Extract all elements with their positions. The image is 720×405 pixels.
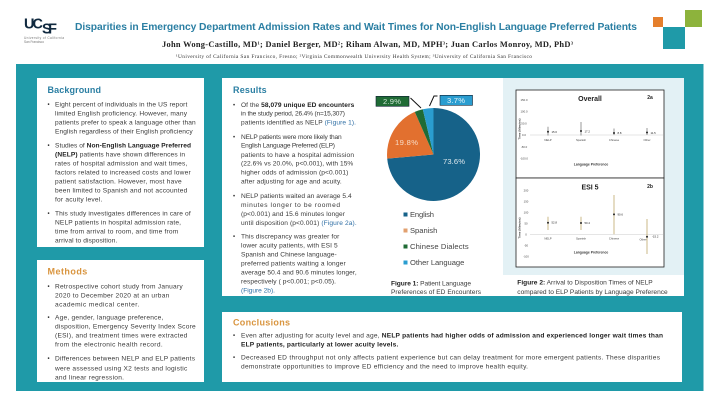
bullet list: background: been limited to Spanish and not accounted xyxy=(55,187,188,194)
caption: figure 1 xyxy=(391,280,482,296)
authors: ; Juan Carlos Monroy, MD, PhD xyxy=(445,40,570,49)
bullet list: methods: Retrospective cohort study from January xyxy=(55,284,183,291)
bullet list: results: in the study period, 26.4% (n=15,307) xyxy=(241,110,345,117)
heading: methods: Methods xyxy=(48,266,87,276)
legend: pie chart: English xyxy=(410,210,434,219)
logo: UCSF xyxy=(24,16,64,44)
chart: ESI 5: 50.4 xyxy=(584,221,590,225)
chart: ESI 5: 0 xyxy=(525,232,527,236)
bullet list: background: (NELP) patients have shown differences in xyxy=(55,152,185,159)
bullet list: results: minutes longer to be roomed xyxy=(241,202,340,209)
panel: methods xyxy=(37,260,204,382)
bullet list: results: This discrepancy was greater for xyxy=(241,234,340,241)
bullet list: results xyxy=(233,102,357,294)
chart: ESI 5: Spanish xyxy=(576,237,586,241)
bullet list: conclusions: Decreased ED throughput not only affects patient experience but can delay treatment for more emergent patients. These disparities xyxy=(241,354,661,361)
affiliations: ¹University of California San Francisco, Fresno; ²Virginia Commonwealth University Health System; ³University of California San Francisco xyxy=(176,53,532,60)
bullet list: conclusions: • xyxy=(233,355,235,361)
chart: ESI 5: -50 xyxy=(524,243,528,247)
chart: overall: -100.0 xyxy=(520,157,528,161)
bullet list: results: • xyxy=(233,135,235,141)
bullet list: methods: 2020 to December 2020 at an urban xyxy=(55,292,170,299)
chart: overall: 8.8 xyxy=(618,131,622,135)
bullet list: background: • xyxy=(48,102,50,108)
authors: 2 xyxy=(338,40,341,46)
bullet list: background: rates of hospital admission and wait times, xyxy=(55,160,187,167)
bullet list: conclusions: demonstrate opportunities to improve ED efficiency and the need to improve health equity. xyxy=(241,363,528,370)
chart: ESI 5: NELP xyxy=(544,237,552,241)
authors: 1 xyxy=(257,40,260,46)
bullet list: results: • xyxy=(233,194,235,200)
chart: ESI 5: 150 xyxy=(524,199,529,203)
chart: overall: Spanish xyxy=(576,138,586,142)
authors: John Wong-Castillo, MD xyxy=(162,40,257,49)
chart: overall: Language Preference xyxy=(574,163,608,167)
chart: ESI 5: 2b xyxy=(647,184,653,190)
bullet list: background: factors related to increased costs and lower xyxy=(55,169,191,176)
caption: figure 2: compared to ELP Patients by Language Preference xyxy=(517,289,668,296)
caption: figure 1: Preferences of ED Encounters xyxy=(391,289,482,296)
chart: ESI 5: -100 xyxy=(523,254,529,258)
bullet list: conclusions: • xyxy=(233,334,235,340)
pie chart: language preferences xyxy=(376,95,480,201)
legend: pie chart: Other Language xyxy=(410,258,464,267)
panel: background xyxy=(37,78,204,247)
panel: results xyxy=(222,78,684,296)
authors: ; Riham Alwan, MD, MPH xyxy=(340,40,443,49)
bullet list: methods: and linear regression. xyxy=(55,374,124,381)
bullet list: background: Eight percent of individuals in the US report xyxy=(55,101,187,108)
chart: overall: Time (Minutes) xyxy=(518,118,522,140)
bullet list: results: (p<0.001) and 15.6 minutes longer xyxy=(241,211,346,218)
bullet list: methods: (ESI), and treatment times were extracted xyxy=(55,333,188,340)
logo: UCSF: University of California xyxy=(24,36,64,40)
panel: conclusions xyxy=(222,312,682,382)
chart: overall: Overall xyxy=(578,96,602,103)
bullet list: results: patients identified as NELP (Figure 1). xyxy=(241,120,356,127)
callout: 3.7%: 3.7% xyxy=(447,96,465,105)
bullet list: background: for acuity level. xyxy=(55,196,102,203)
bullet list: background xyxy=(48,101,196,244)
bullet list: results: NELP patients were more likely than xyxy=(241,134,342,141)
chart: ESI 5: Language Preference xyxy=(574,251,608,255)
caption: figure 2: Figure 2: Arrival to Disposition Times of NELP xyxy=(517,279,653,286)
bullet list: background: limited English proficiency. However, many xyxy=(55,110,188,117)
bullet list: results: • xyxy=(233,235,235,241)
chart: overall: 2a xyxy=(647,95,653,101)
chart: overall: -50.0 xyxy=(521,145,528,149)
chart: overall: Chinese xyxy=(609,138,620,142)
pie chart: language preferences: 19.8% xyxy=(395,138,418,147)
teal background panel xyxy=(16,64,704,391)
heading: conclusions: Conclusions xyxy=(233,318,290,328)
bullet list: background: time from arrival to room, and time from xyxy=(55,228,179,235)
authors: 3 xyxy=(571,40,574,46)
bullet list: results: • xyxy=(233,103,235,109)
chart: ESI 5: 90.6 xyxy=(618,212,623,216)
bullet list: background: • xyxy=(48,211,50,217)
bullet list: background: This study investigates differences in care of xyxy=(55,210,191,217)
bullet list: conclusions: ELP patients, particularly at lower acuity levels. xyxy=(241,342,398,349)
logo: UCSF: UC xyxy=(24,16,44,32)
bullet list: background: • xyxy=(48,144,50,150)
logo: UCSF: SF xyxy=(42,22,57,38)
caption: figure 1: Figure 1: Patient Language xyxy=(391,280,471,288)
chart: ESI 5: ESI 5 xyxy=(581,184,599,192)
authors: 3 xyxy=(443,40,446,46)
bullet list: results: until disposition (p<0.001) (Figure 2a). xyxy=(241,220,357,227)
chart: overall: 100.0 xyxy=(520,110,528,114)
bullet list: results: NELP patients waited an average 5.4 xyxy=(241,193,352,200)
chart: overall: NELP xyxy=(544,138,552,142)
bullet list: results: after adjusting for age and acuity. xyxy=(241,179,342,186)
bullet list: results: lower acuity patients, with ESI 5 xyxy=(241,243,338,250)
bullet list: background: patient satisfaction. However, most have xyxy=(55,178,182,185)
title: Disparities in Emergency Department Admission Rates and Wait Times for Non-English Language Preferred Patients xyxy=(75,22,637,33)
bullet list: methods: were assessed using X2 tests and logistic xyxy=(54,365,188,372)
header xyxy=(24,10,702,60)
bullet list: results: Of the 58,079 unique ED encounters xyxy=(241,102,355,109)
bullet list: methods: from the electronic health record. xyxy=(55,342,163,349)
chart: overall: 50.0 xyxy=(521,121,527,125)
bullet list: methods: disposition, Emergency Severity Index Score xyxy=(55,324,196,331)
bullet list: results: patients to have a hospital admission xyxy=(241,152,354,159)
bullet list: background: NELP patients in hospital admission rate, xyxy=(55,219,181,226)
chart: overall: 15.6 xyxy=(552,130,557,134)
chart: ESI 5: 200 xyxy=(524,188,529,192)
logo: UCSF: San Francisco xyxy=(24,40,44,44)
chart: ESI 5 xyxy=(516,178,664,267)
bullet list: methods: • xyxy=(48,285,50,291)
bullet list: results: average 50.4 and 90.6 minutes longer, xyxy=(241,269,357,276)
bullet list: results: (22.6% vs 20.0%, p<0.001), with 15% xyxy=(241,161,353,168)
bullet list: methods: • xyxy=(48,356,50,362)
caption: figure 2 xyxy=(517,279,668,296)
callout: 2.9%: 2.9% xyxy=(383,97,401,106)
legend: pie chart: Spanish xyxy=(410,226,437,235)
bullet list: results: Spanish and Chinese language- xyxy=(241,251,337,258)
bullet list: background: Studies of Non-English Language Preferred xyxy=(55,143,191,150)
bullet list: background: patients prefer to speak a language other than xyxy=(55,119,196,126)
chart: ESI 5: 52.8 xyxy=(552,221,557,225)
bullet list: background: English regardless of their English proficiency xyxy=(55,129,193,136)
chart: ESI 5: Chinese xyxy=(609,237,620,241)
chart: overall: 11.5 xyxy=(650,131,656,135)
authors: ; Daniel Berger, MD xyxy=(260,40,338,49)
pie chart: language preferences: 73.6% xyxy=(443,157,465,166)
chart: ESI 5: Time (Minutes) xyxy=(518,217,522,239)
chart: overall: Other xyxy=(644,138,651,142)
chart: ESI 5: 100 xyxy=(524,210,529,214)
bullet list: results: preferred patients waiting a longer xyxy=(241,260,346,267)
chart: overall xyxy=(516,90,664,178)
chart: ESI 5: 50 xyxy=(524,221,528,225)
legend: pie chart xyxy=(404,210,469,267)
bullet list: background: arrival to disposition. xyxy=(55,237,117,244)
bullet list: results: respectively ( p<0.001; p<0.05). xyxy=(241,278,336,285)
panel: figure 2 charts xyxy=(503,78,684,275)
legend: pie chart: Chinese Dialects xyxy=(410,242,469,251)
chart: overall: 0.0 xyxy=(522,133,526,137)
bullet list: results: (Figure 2b). xyxy=(241,287,275,294)
bullet list: conclusions xyxy=(233,333,663,370)
chart: ESI 5: Other xyxy=(640,238,647,242)
bullet list: methods: Differences between NELP and ELP patients xyxy=(55,355,196,362)
bullet list: methods: Age, gender, language preference, xyxy=(55,315,163,322)
heading: results: Results xyxy=(233,85,267,95)
icon: corner squares xyxy=(653,10,702,49)
heading: background: Background xyxy=(48,85,101,95)
bullet list: conclusions: Even after adjusting for acuity level and age, NELP patients had higher odds of admission and experienced longer wait times than xyxy=(241,333,663,340)
chart: overall: 150.0 xyxy=(520,98,528,102)
bullet list: results: English Language Preferred (ELP) xyxy=(241,143,335,150)
bullet list: methods: • xyxy=(48,316,50,322)
bullet list: methods xyxy=(48,284,196,381)
bullet list: methods: academic medical center. xyxy=(55,301,139,308)
bullet list: results: higher odds of admission (p<0.001) xyxy=(241,170,348,177)
chart: overall: 17.2 xyxy=(584,130,590,134)
chart: ESI 5: -15.2 xyxy=(652,235,659,239)
